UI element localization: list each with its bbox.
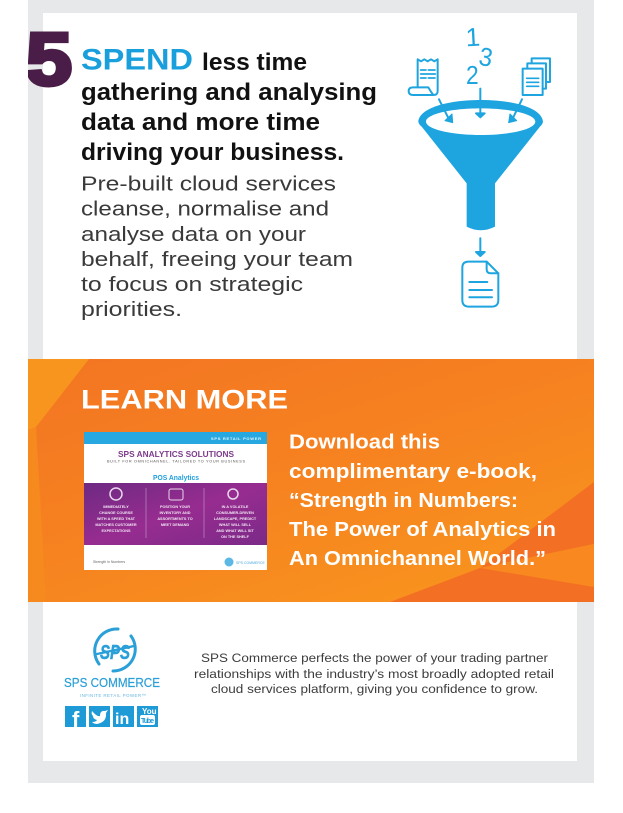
company description: SPS Commerce perfects the power of your trading partner (201, 651, 548, 665)
purple band: WHAT WILL SELL (219, 523, 252, 527)
icon: digits: 2 (466, 60, 479, 90)
purple band: ON THE SHELF (221, 535, 250, 539)
logo wordmark: SPS COMMERCE (64, 675, 160, 690)
cover title: SPS ANALYTICS SOLUTIONS (118, 449, 234, 459)
icon: twitter (89, 706, 110, 727)
logo: SPS Commerce (64, 629, 160, 698)
call to action text (289, 432, 556, 570)
panel: step five (26, 18, 377, 321)
body text (81, 172, 353, 321)
arrow: output (476, 238, 485, 256)
purple band: WITH A SPEED THAT (97, 517, 136, 521)
purple band: EXPECTATIONS (102, 529, 131, 533)
body text: behalf, freeing your team (81, 248, 353, 271)
heading (81, 44, 377, 166)
e-book cover thumbnail: Strength in Numbers (93, 560, 125, 564)
body text: Pre-built cloud services (81, 172, 336, 196)
logo mark: SPS (100, 642, 130, 664)
purple band: MATCHES CUSTOMER (95, 523, 137, 527)
logo tagline: INFINITE RETAIL POWER™ (80, 693, 146, 698)
company description: relationships with the industry’s most broadly adopted retail (194, 667, 554, 681)
heading: gathering and analysing (81, 79, 377, 106)
body text: to focus on strategic (81, 273, 303, 296)
purple band: INVENTORY AND (159, 511, 191, 515)
call to action text: complimentary e-book, (289, 461, 537, 483)
step number: 5 (26, 18, 72, 101)
purple band: IN A VOLATILE (222, 505, 249, 509)
icon: receipt (409, 59, 438, 95)
icon: youtube (137, 706, 158, 727)
purple band: CHANGE COURSE (99, 511, 133, 515)
icon: digits: 1 (465, 22, 481, 52)
body text: analyse data on your (81, 223, 306, 246)
purple band: ASSORTMENTS TO (157, 517, 193, 521)
call to action text: The Power of Analytics in (289, 519, 556, 541)
body text: cleanse, normalise and (81, 198, 329, 220)
icon: document stack (523, 58, 550, 95)
call to action text: “Strength in Numbers: (289, 490, 518, 512)
call to action text: Download this (289, 432, 440, 454)
arrow: centre input (476, 89, 485, 117)
icon: linkedin: in (115, 711, 129, 728)
white content panel (43, 13, 577, 761)
purple band (84, 483, 267, 545)
e-book cover thumbnail: SPS RETAIL POWER (211, 436, 261, 441)
purple band: IMMEDIATELY (103, 505, 129, 509)
e-book cover thumbnail: SPS COMMERCE (236, 561, 265, 565)
purple band: LANDSCAPE, PREDICT (214, 517, 257, 521)
company description (194, 651, 554, 696)
purple band: AND WHAT WILL SIT (216, 529, 254, 533)
icon: youtube: Tube (141, 718, 154, 725)
heading: SPEND (81, 44, 193, 76)
heading: data and more time (81, 109, 320, 136)
arrow: left input (439, 99, 453, 123)
heading: driving your business. (81, 139, 344, 166)
panel: learn more banner (28, 359, 594, 602)
purple band: MEET DEMAND (161, 523, 189, 527)
company description: cloud services platform, giving you confidence to grow. (211, 682, 538, 696)
e-book cover thumbnail: POS Analytics (153, 475, 199, 482)
icon: digits: 3 (477, 41, 495, 73)
icon: youtube: You (142, 707, 157, 716)
heading: learn more: LEARN MORE (81, 384, 288, 414)
icon: facebook: f (72, 707, 80, 732)
body text: priorities. (81, 298, 182, 321)
purple band: POSITION YOUR (160, 505, 190, 509)
call to action text: An Omnichannel World.” (289, 548, 546, 570)
social icons (65, 706, 158, 732)
e-book cover thumbnail: BUILT FOR OMNICHANNEL. TAILORED TO YOUR BUSINESS (107, 460, 245, 464)
icon: funnel body (418, 100, 543, 230)
icon: data funnel (409, 22, 550, 307)
e-book cover thumbnail (84, 432, 267, 570)
purple band: CONSUMER-DRIVEN (216, 511, 254, 515)
icon: output document (462, 262, 498, 307)
icon: digits (465, 22, 495, 90)
arrow: right input (509, 99, 522, 123)
heading: less time (202, 49, 307, 76)
